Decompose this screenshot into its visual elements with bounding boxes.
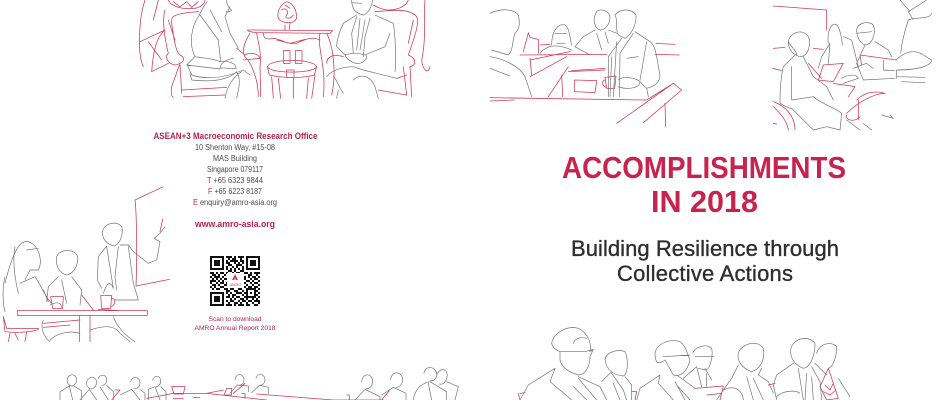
title: ACCOMPLISHMENTS (562, 150, 846, 185)
illustration: small group around a laptop (773, 0, 932, 130)
title: IN 2018 (651, 184, 758, 219)
contact address: T +65 6323 9844 (207, 176, 263, 185)
illustration: presenter with two seated colleagues (3, 187, 169, 342)
website: www.amro-asia.org (194, 219, 275, 230)
QR code: AMRO (230, 282, 242, 287)
subtitle: Building Resilience through (571, 236, 839, 261)
contact address: MAS Building (213, 154, 257, 163)
contact address: 10 Shenton Way, #15-08 (195, 143, 275, 152)
subtitle: Collective Actions (617, 261, 793, 286)
contact address: E enquiry@amro-asia.org (193, 198, 277, 207)
subtitle (571, 236, 839, 286)
illustration: two men seated in ornate chairs (139, 0, 430, 98)
contact address (193, 143, 277, 207)
QR code (210, 256, 260, 306)
title (562, 150, 846, 219)
contact address: Singapore 079117 (207, 165, 263, 174)
illustration: long meeting table with delegates (60, 367, 458, 400)
contact address: F +65 6223 8187 (208, 187, 262, 196)
organisation name: ASEAN+3 Macroeconomic Research Office (154, 131, 318, 141)
QR caption (194, 316, 276, 332)
illustration: colleagues talking with coffee (490, 10, 682, 127)
QR caption: Scan to download (208, 316, 262, 323)
QR caption: AMRO Annual Report 2018 (194, 325, 276, 332)
illustration: seated audience in a row (518, 328, 850, 400)
